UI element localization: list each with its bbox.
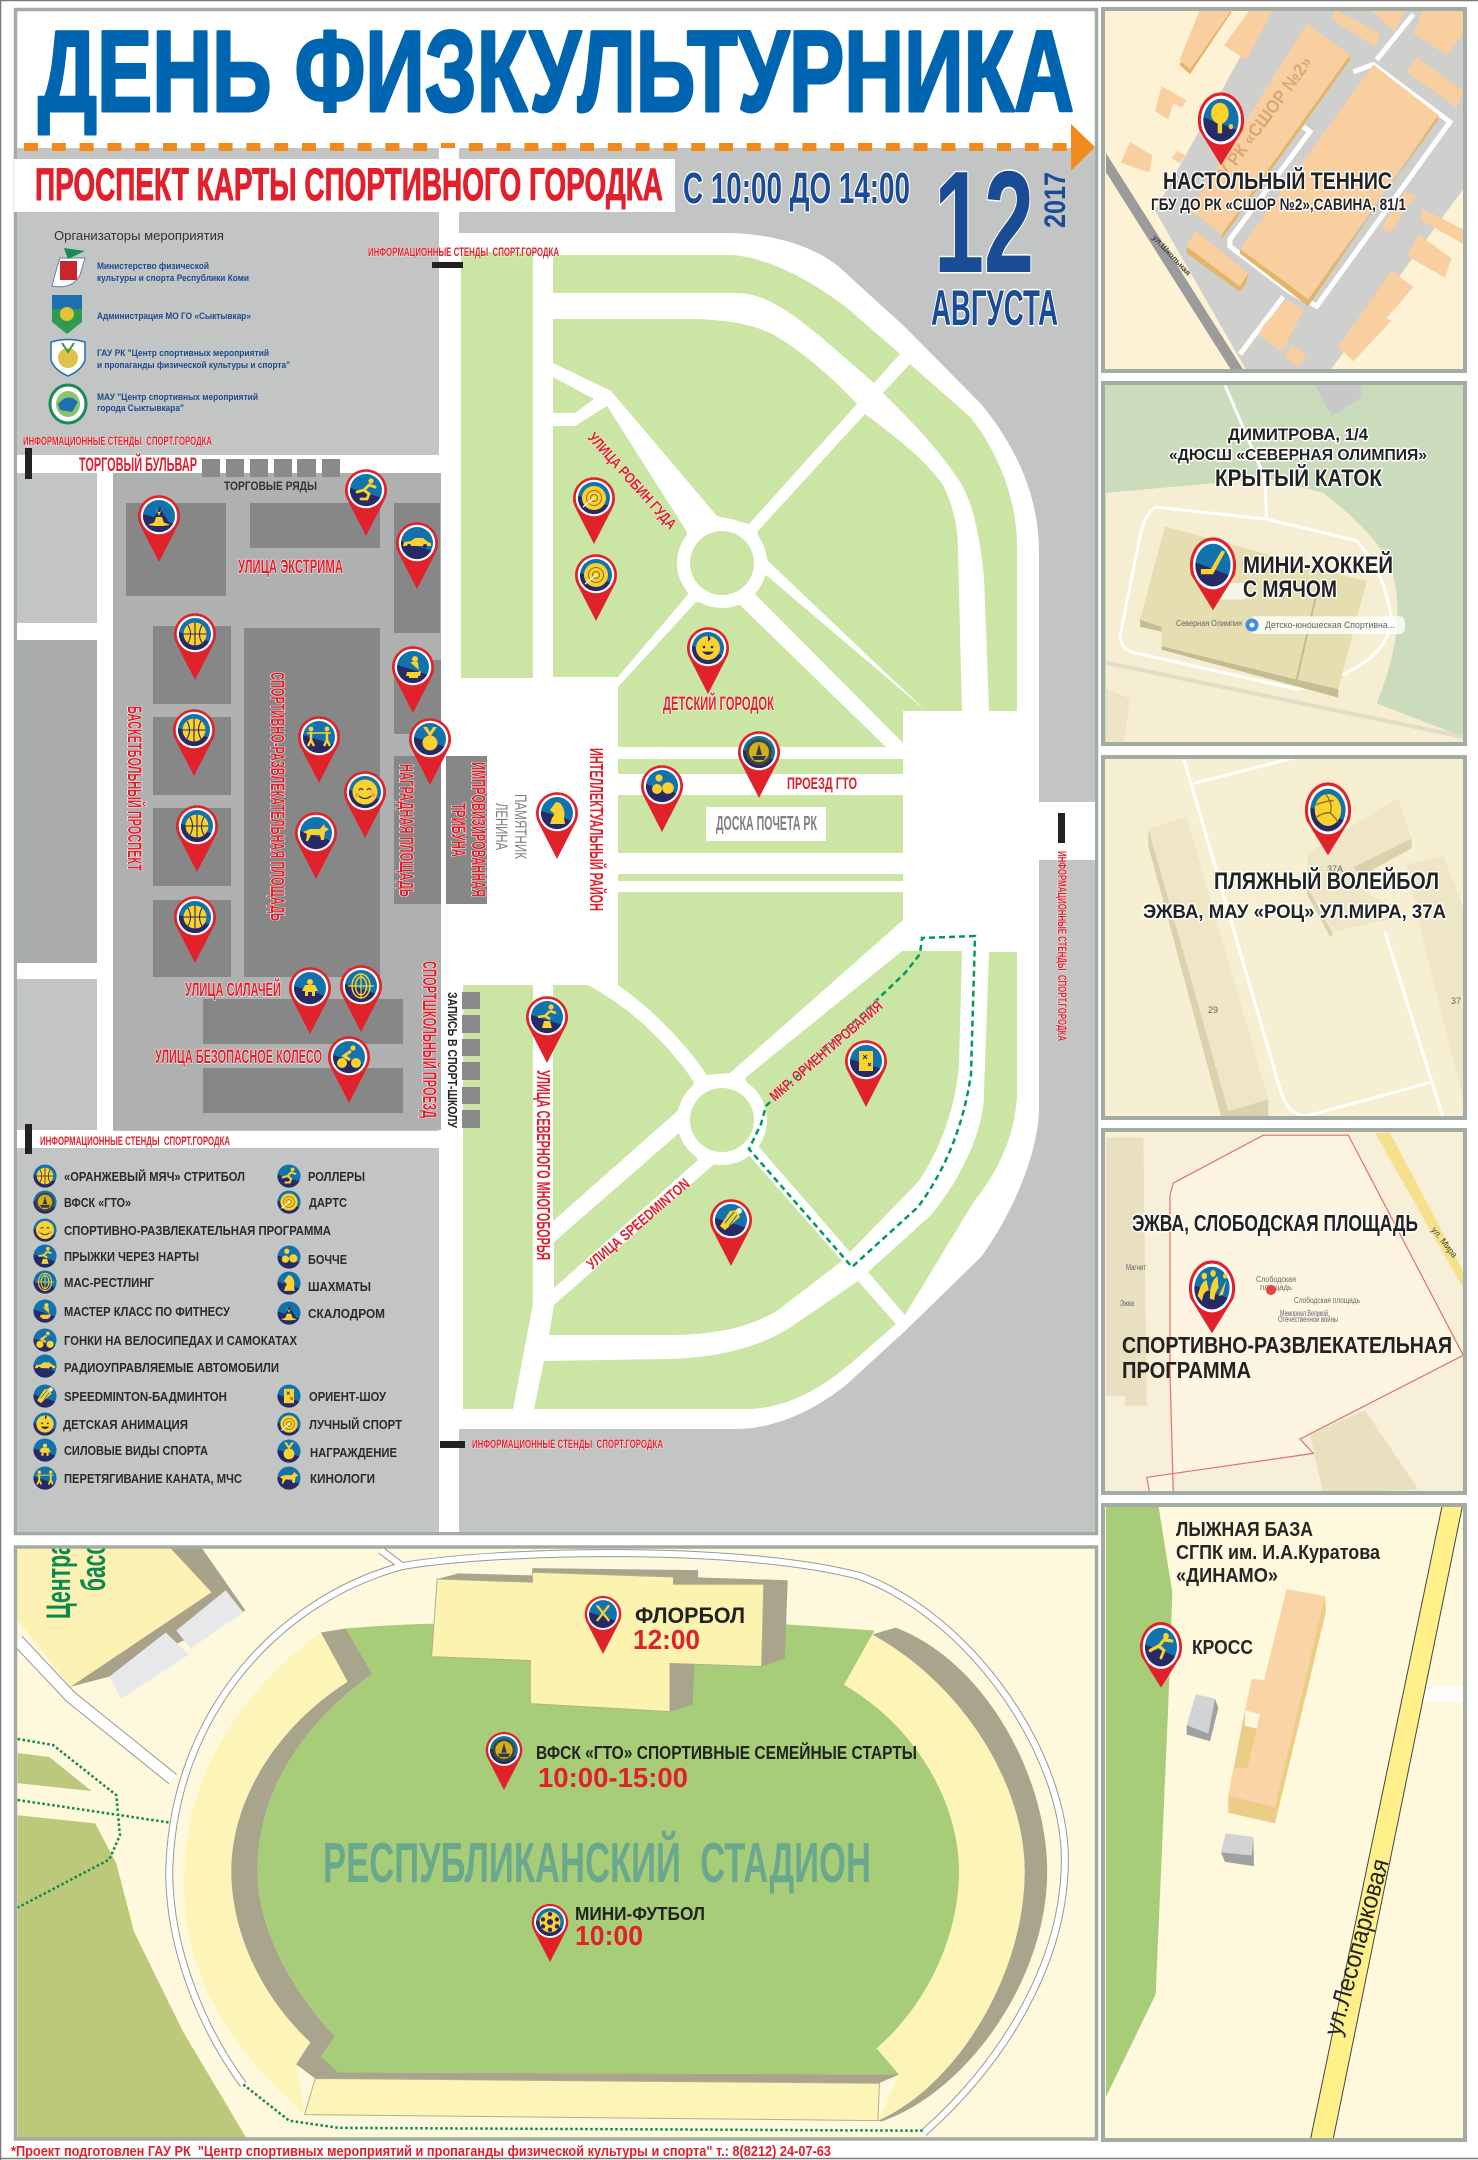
- street labels: УЛИЦА СЕВЕРНОГО МНОГОБОРЬЯ: [533, 1070, 553, 1260]
- organizers: Организаторы мероприятия: [54, 228, 224, 243]
- building label: У РК «СШОР №2»: [1214, 53, 1316, 181]
- road network: white base: [17, 148, 1095, 1532]
- arrow: dashed orange: [24, 124, 1095, 171]
- legend: [33, 1164, 402, 1490]
- label: mini football: 10:00: [575, 1920, 643, 1951]
- map labels: programme: [1120, 1225, 1459, 1324]
- legend: БОЧЧЕ: [308, 1252, 347, 1267]
- legend: ВФСК «ГТО»: [64, 1195, 131, 1210]
- street labels: ИНФОРМАЦИОННЫЕ СТЕНДЫ СПОРТ.ГОРОДКА: [40, 1134, 230, 1148]
- label: mini football: МИНИ-ФУТБОЛ: [575, 1904, 705, 1924]
- street labels: НАГРАДНАЯ ПЛОЩАДЬ: [395, 764, 416, 897]
- subtitle: [14, 159, 675, 212]
- label: floorball: 12:00: [633, 1624, 700, 1655]
- logo: municipal sport centre: [50, 385, 86, 423]
- event hours: С 10:00 ДО 14:00: [683, 164, 910, 213]
- legend: ДАРТС: [309, 1195, 348, 1210]
- legend: МАСТЕР КЛАСС ПО ФИТНЕСУ: [64, 1304, 231, 1319]
- legend: ПРЫЖКИ ЧЕРЕЗ НАРТЫ: [64, 1249, 199, 1264]
- address: hockey: «ДЮСШ «СЕВЕРНАЯ ОЛИМПИЯ»: [1169, 447, 1427, 464]
- label: GTO family starts: ВФСК «ГТО» СПОРТИВНЫЕ СЕМЕЙНЫЕ СТАРТЫ: [536, 1742, 917, 1763]
- panel: park green areas: [461, 252, 1017, 1409]
- subtitle: ПРОСПЕКТ КАРТЫ СПОРТИВНОГО ГОРОДКА: [35, 159, 663, 210]
- legend: НАГРАЖДЕНИЕ: [310, 1445, 397, 1460]
- information stands markers: [25, 262, 1065, 1448]
- legend: ДЕТСКАЯ АНИМАЦИЯ: [63, 1417, 188, 1432]
- pin: mini football: [532, 1904, 568, 1962]
- map labels: programme: Магнит: [1126, 1263, 1146, 1272]
- map labels: programme: площадь: [1260, 1283, 1292, 1292]
- panel: beach volleyball map: [1103, 757, 1465, 1118]
- map labels: programme: Эжва: [1120, 1299, 1134, 1308]
- map labels: programme: ул. Мира: [1429, 1225, 1459, 1260]
- pin: floorball: [585, 1596, 621, 1654]
- pin: GTO: [486, 1732, 522, 1790]
- label: stadium name: РЕСПУБЛИКАНСКИЙ СТАДИОН: [323, 1830, 871, 1895]
- heading: ski base: «ДИНАМО»: [1176, 1565, 1278, 1587]
- heading: table tennis: НАСТОЛЬНЫЙ ТЕННИС: [1163, 167, 1392, 195]
- map labels: hockey: Северная Олимпия: [1176, 619, 1242, 628]
- legend: РОЛЛЕРЫ: [308, 1169, 365, 1184]
- panel: table tennis map: [1103, 9, 1465, 371]
- logo: sport centre: [51, 340, 85, 376]
- heading: hockey: [1243, 551, 1393, 603]
- legend: ШАХМАТЫ: [308, 1279, 371, 1294]
- honor board: [706, 807, 826, 841]
- street labels: СПОРТШКОЛЬНЫЙ ПРОЕЗД: [418, 961, 440, 1118]
- street labels: ИМПРОВИЗИРОВАННАЯ: [467, 762, 488, 897]
- panel: ski base map: [1103, 1505, 1465, 2142]
- street labels: МКР. ОРИЕНТИРОВАНИЯ: [766, 998, 886, 1105]
- street labels: БАСКЕТБОЛЬНЫЙ ПРОСПЕКТ: [123, 706, 145, 871]
- organizers: Министерство физической: [97, 261, 209, 271]
- street labels: [23, 245, 1069, 1451]
- footer note: *Проект подготовлен ГАУ РК "Центр спортивных мероприятий и пропаганды физической культуры и спорта" т.: 8(8212) 24-07-63: [11, 2143, 831, 2160]
- street labels: ТОРГОВЫЕ РЯДЫ: [224, 479, 317, 493]
- label: GTO family starts: 10:00-15:00: [538, 1762, 688, 1793]
- street labels: ИНФОРМАЦИОННЫЕ СТЕНДЫ СПОРТ.ГОРОДКА: [1055, 851, 1069, 1041]
- logo: ministry: [52, 248, 85, 287]
- pin: volleyball: [1305, 782, 1351, 855]
- street labels: ЗАПИСЬ В СПОРТ-ШКОЛУ: [445, 992, 460, 1129]
- heading: ski base: [1176, 1519, 1381, 1587]
- heading: ski base: СГПК им. И.А.Куратова: [1176, 1542, 1381, 1564]
- street labels: УЛИЦА БЕЗОПАСНОЕ КОЛЕСО: [155, 1047, 322, 1068]
- pins: main map: [138, 469, 887, 1266]
- street labels: ТРИБУНА: [447, 803, 468, 857]
- house numbers: 37: [1451, 996, 1461, 1006]
- panel: sports town blocks: [17, 459, 487, 1130]
- map labels: programme: Отечественной войны: [1278, 1315, 1338, 1324]
- panel: entertainment programme map: [1103, 1130, 1465, 1494]
- organizers: МАУ "Центр спортивных мероприятий: [97, 392, 258, 402]
- map labels: programme: Мемориал Великой: [1280, 1309, 1328, 1318]
- label: swimming pool: басс: [75, 1543, 113, 1591]
- street labels: ПАМЯТНИК: [511, 794, 530, 859]
- house numbers: 37А: [1327, 864, 1343, 874]
- map labels: programme: Слободская: [1256, 1275, 1296, 1284]
- organizers: культуры и спорта Республики Коми: [97, 273, 249, 283]
- organizers: города Сыктывкара": [97, 403, 184, 413]
- legend: СИЛОВЫЕ ВИДЫ СПОРТА: [64, 1443, 209, 1458]
- date: 12: [934, 141, 1034, 303]
- address: table tennis: ГБУ ДО РК «СШОР №2»,САВИНА, 81/1: [1151, 195, 1406, 214]
- heading: ski base: ЛЫЖНАЯ БАЗА: [1176, 1519, 1313, 1541]
- heading: hockey: С МЯЧОМ: [1243, 576, 1337, 603]
- pin: table tennis: [1198, 92, 1244, 165]
- heading: programme: [1122, 1332, 1452, 1383]
- organizers: [50, 228, 290, 423]
- street labels: ДЕТСКИЙ ГОРОДОК: [663, 693, 774, 715]
- legend: ПЕРЕТЯГИВАНИЕ КАНАТА, МЧС: [64, 1471, 243, 1486]
- heading: hockey: МИНИ-ХОККЕЙ: [1243, 551, 1393, 579]
- street labels: ИНФОРМАЦИОННЫЕ СТЕНДЫ СПОРТ.ГОРОДКА: [23, 434, 212, 448]
- address: hockey: ДИМИТРОВА, 1/4: [1228, 425, 1369, 444]
- legend: ГОНКИ НА ВЕЛОСИПЕДАХ И САМОКАТАХ: [64, 1333, 297, 1348]
- street labels: ИНФОРМАЦИОННЫЕ СТЕНДЫ СПОРТ.ГОРОДКА: [472, 1437, 663, 1451]
- house numbers: [1208, 864, 1461, 1015]
- legend: SPEEDMINTON-БАДМИНТОН: [64, 1389, 227, 1404]
- street labels: УЛИЦА СИЛАЧЕЙ: [185, 979, 281, 1001]
- organizers: и пропаганды физической культуры и спорта": [97, 360, 290, 370]
- map labels: programme: Слободская площадь: [1294, 1296, 1360, 1305]
- date: 2017: [1039, 172, 1072, 228]
- logo: city administration: [52, 295, 82, 334]
- pin: hockey: [1190, 537, 1236, 610]
- label: GTO family starts: [536, 1742, 917, 1793]
- street labels: ТОРГОВЫЙ БУЛЬВАР: [79, 454, 197, 476]
- street labels: СПОРТИВНО-РАЗВЛЕКАТЕЛЬНАЯ ПЛОЩАДЬ: [266, 672, 287, 921]
- street labels: УЛИЦА РОБИН ГУДА: [584, 429, 680, 533]
- legend: ОРИЕНТ-ШОУ: [309, 1389, 387, 1404]
- pin: cross: [1140, 1622, 1182, 1688]
- address: volleyball: ЭЖВА, МАУ «РОЦ» УЛ.МИРА, 37А: [1143, 902, 1446, 923]
- house numbers: 29: [1208, 1005, 1218, 1015]
- legend: «ОРАНЖЕВЫЙ МЯЧ» СТРИТБОЛ: [64, 1169, 245, 1184]
- panel: mini hockey map: [1103, 383, 1465, 746]
- label: swimming pool: Центра: [40, 1542, 78, 1619]
- street labels: ИНФОРМАЦИОННЫЕ СТЕНДЫ СПОРТ.ГОРОДКА: [368, 245, 559, 259]
- label: floorball: ФЛОРБОЛ: [635, 1603, 745, 1628]
- heading: programme: ПРОГРАММА: [1122, 1357, 1251, 1383]
- label: swimming pool: [46, 1548, 106, 1618]
- address: hockey: [1169, 425, 1427, 492]
- road label: ул.Школьная: [1151, 233, 1193, 278]
- title: ДЕНЬ ФИЗКУЛЬТУРНИКА: [38, 8, 1074, 136]
- pin: programme: [1189, 1260, 1235, 1333]
- label: mini football: [575, 1904, 705, 1951]
- legend: РАДИОУПРАВЛЯЕМЫЕ АВТОМОБИЛИ: [64, 1360, 279, 1375]
- street labels: ПРОЕЗД ГТО: [787, 774, 857, 793]
- address: hockey: КРЫТЫЙ КАТОК: [1215, 464, 1382, 492]
- road label: ул.Лесопарковая: [1319, 1856, 1395, 2039]
- map labels: hockey: [1176, 618, 1395, 632]
- street labels: УЛИЦА SPEEDMINTON: [584, 1176, 693, 1273]
- organizers: ГАУ РК "Центр спортивных мероприятий: [97, 348, 269, 358]
- panel: main map: [14, 8, 1096, 1534]
- organizers: Администрация МО ГО «Сыктывкар»: [97, 311, 251, 321]
- legend: СПОРТИВНО-РАЗВЛЕКАТЕЛЬНАЯ ПРОГРАММА: [64, 1223, 332, 1238]
- label: cross: КРОСС: [1192, 1637, 1253, 1659]
- route: orienteering micro-district: [749, 936, 975, 1267]
- map labels: hockey: Детско-юношеская Спортивна...: [1265, 620, 1395, 630]
- legend: КИНОЛОГИ: [310, 1471, 375, 1486]
- date: АВГУСТА: [931, 280, 1058, 336]
- label: floorball: [633, 1603, 745, 1655]
- street labels: ЛЕНИНА: [492, 803, 511, 850]
- street labels: ИНТЕЛЛЕКТУАЛЬНЫЙ РАЙОН: [586, 748, 607, 911]
- street labels: УЛИЦА ЭКСТРИМА: [238, 557, 343, 578]
- panel: stadium: [15, 1542, 1096, 2139]
- legend: МАС-РЕСТЛИНГ: [64, 1275, 155, 1290]
- legend: ЛУЧНЫЙ СПОРТ: [309, 1417, 402, 1432]
- legend: СКАЛОДРОМ: [308, 1306, 385, 1321]
- honor board: ДОСКА ПОЧЕТА РК: [716, 813, 817, 835]
